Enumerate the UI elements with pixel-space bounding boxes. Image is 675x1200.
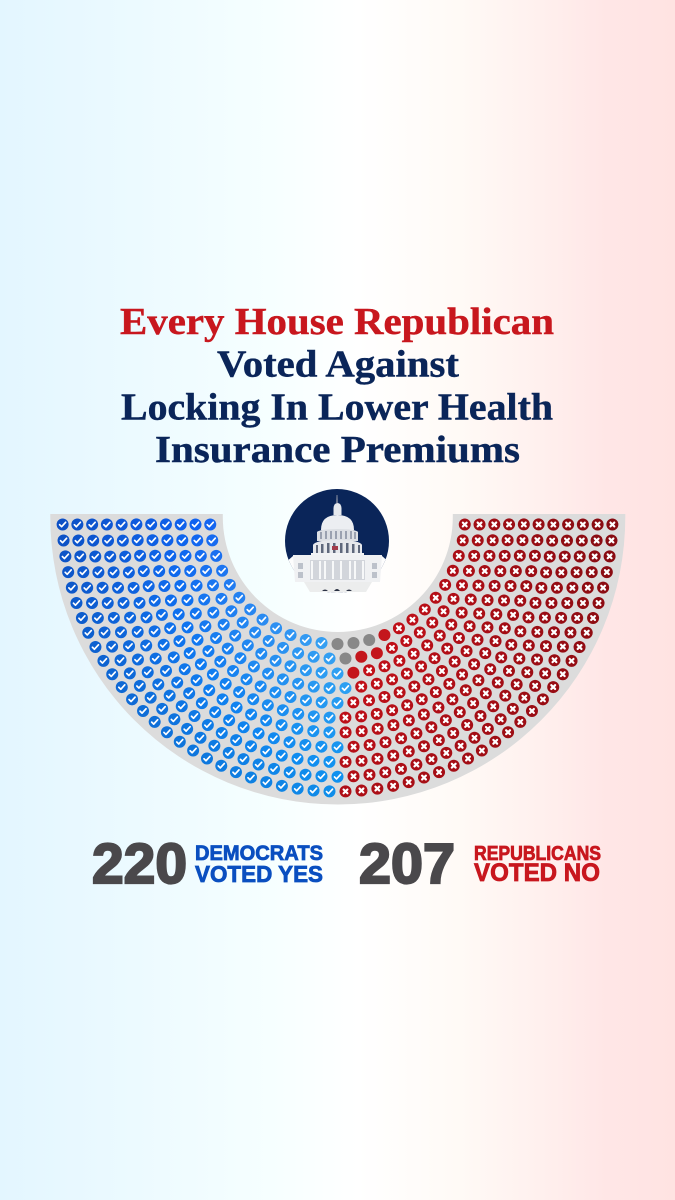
seating chart (57, 518, 618, 797)
label: Democrats: DEMOCRATS (195, 842, 323, 865)
label: voted no: VOTED NO (474, 859, 600, 887)
title line: Every House Republican: Every House Republican (120, 301, 554, 343)
label: Republicans: REPUBLICANS (474, 843, 601, 865)
grey seats: not voting (332, 634, 375, 665)
tally: 207 Republicans voted no (359, 832, 601, 896)
tally: 220 Democrats voted yes (92, 832, 323, 896)
solid red seats (347, 629, 390, 679)
label: voted yes: VOTED YES (195, 861, 323, 887)
title (120, 301, 554, 471)
blue seats: 220 Democrats voted yes (57, 518, 351, 797)
title line: Insurance Premiums: Insurance Premiums (155, 429, 520, 471)
title line: Voted Against: Voted Against (217, 344, 459, 386)
semicircle seating band (50, 514, 625, 804)
icon: US Capitol in navy circle (285, 489, 390, 600)
title line: Locking In Lower Health: Locking In Lower Health (121, 386, 553, 428)
number 207: 207 (359, 832, 455, 896)
red seats: 207 Republicans voted no (339, 518, 618, 797)
number 220: 220 (92, 832, 187, 896)
